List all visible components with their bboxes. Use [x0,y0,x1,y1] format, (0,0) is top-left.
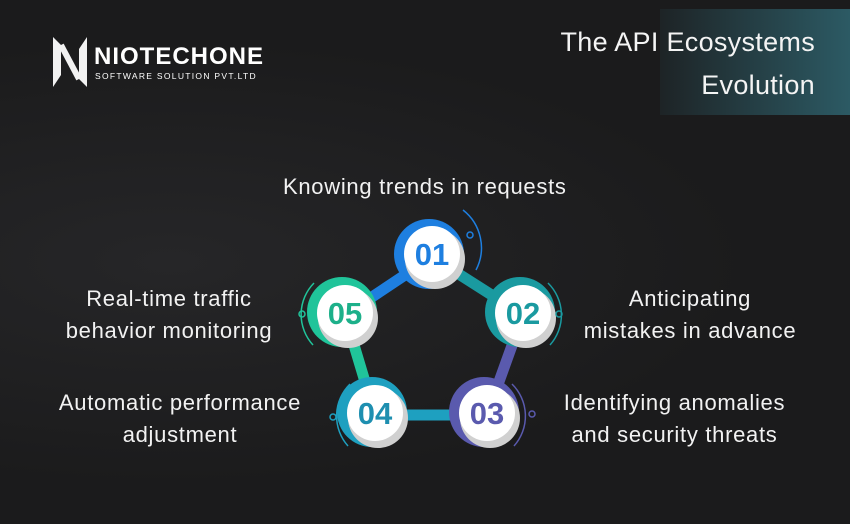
label 03: and security threats [572,422,777,447]
node 03: 03 [470,396,504,431]
node 02 [485,277,562,348]
label 05 [66,286,272,343]
label 04: adjustment [123,422,237,447]
label 02: mistakes in advance [584,318,796,343]
label 05: behavior monitoring [66,318,272,343]
title: The API Ecosystems [560,27,815,57]
node 01: 01 [415,237,449,272]
label 01: Knowing trends in requests [283,174,567,199]
label 03: Identifying anomalies [564,390,785,415]
node 05 [299,277,378,348]
label 02 [584,286,796,343]
brand name: NIOTECHONE [94,43,264,70]
node 04 [330,377,408,448]
node 03 [449,377,535,448]
title: Evolution [701,70,815,100]
node 05: 05 [328,296,362,331]
logo [53,37,264,87]
label 04 [59,390,301,447]
label 03 [564,390,785,447]
title [560,27,815,100]
label 02: Anticipating [629,286,751,311]
logo: SOFTWARE SOLUTION PVT.LTD [95,71,257,81]
label 05: Real-time traffic [86,286,252,311]
label 04: Automatic performance [59,390,301,415]
node 01 [394,210,481,289]
node 02: 02 [506,296,540,331]
node 04: 04 [358,396,393,431]
icon: N logo [53,37,87,87]
title panel [660,9,850,115]
